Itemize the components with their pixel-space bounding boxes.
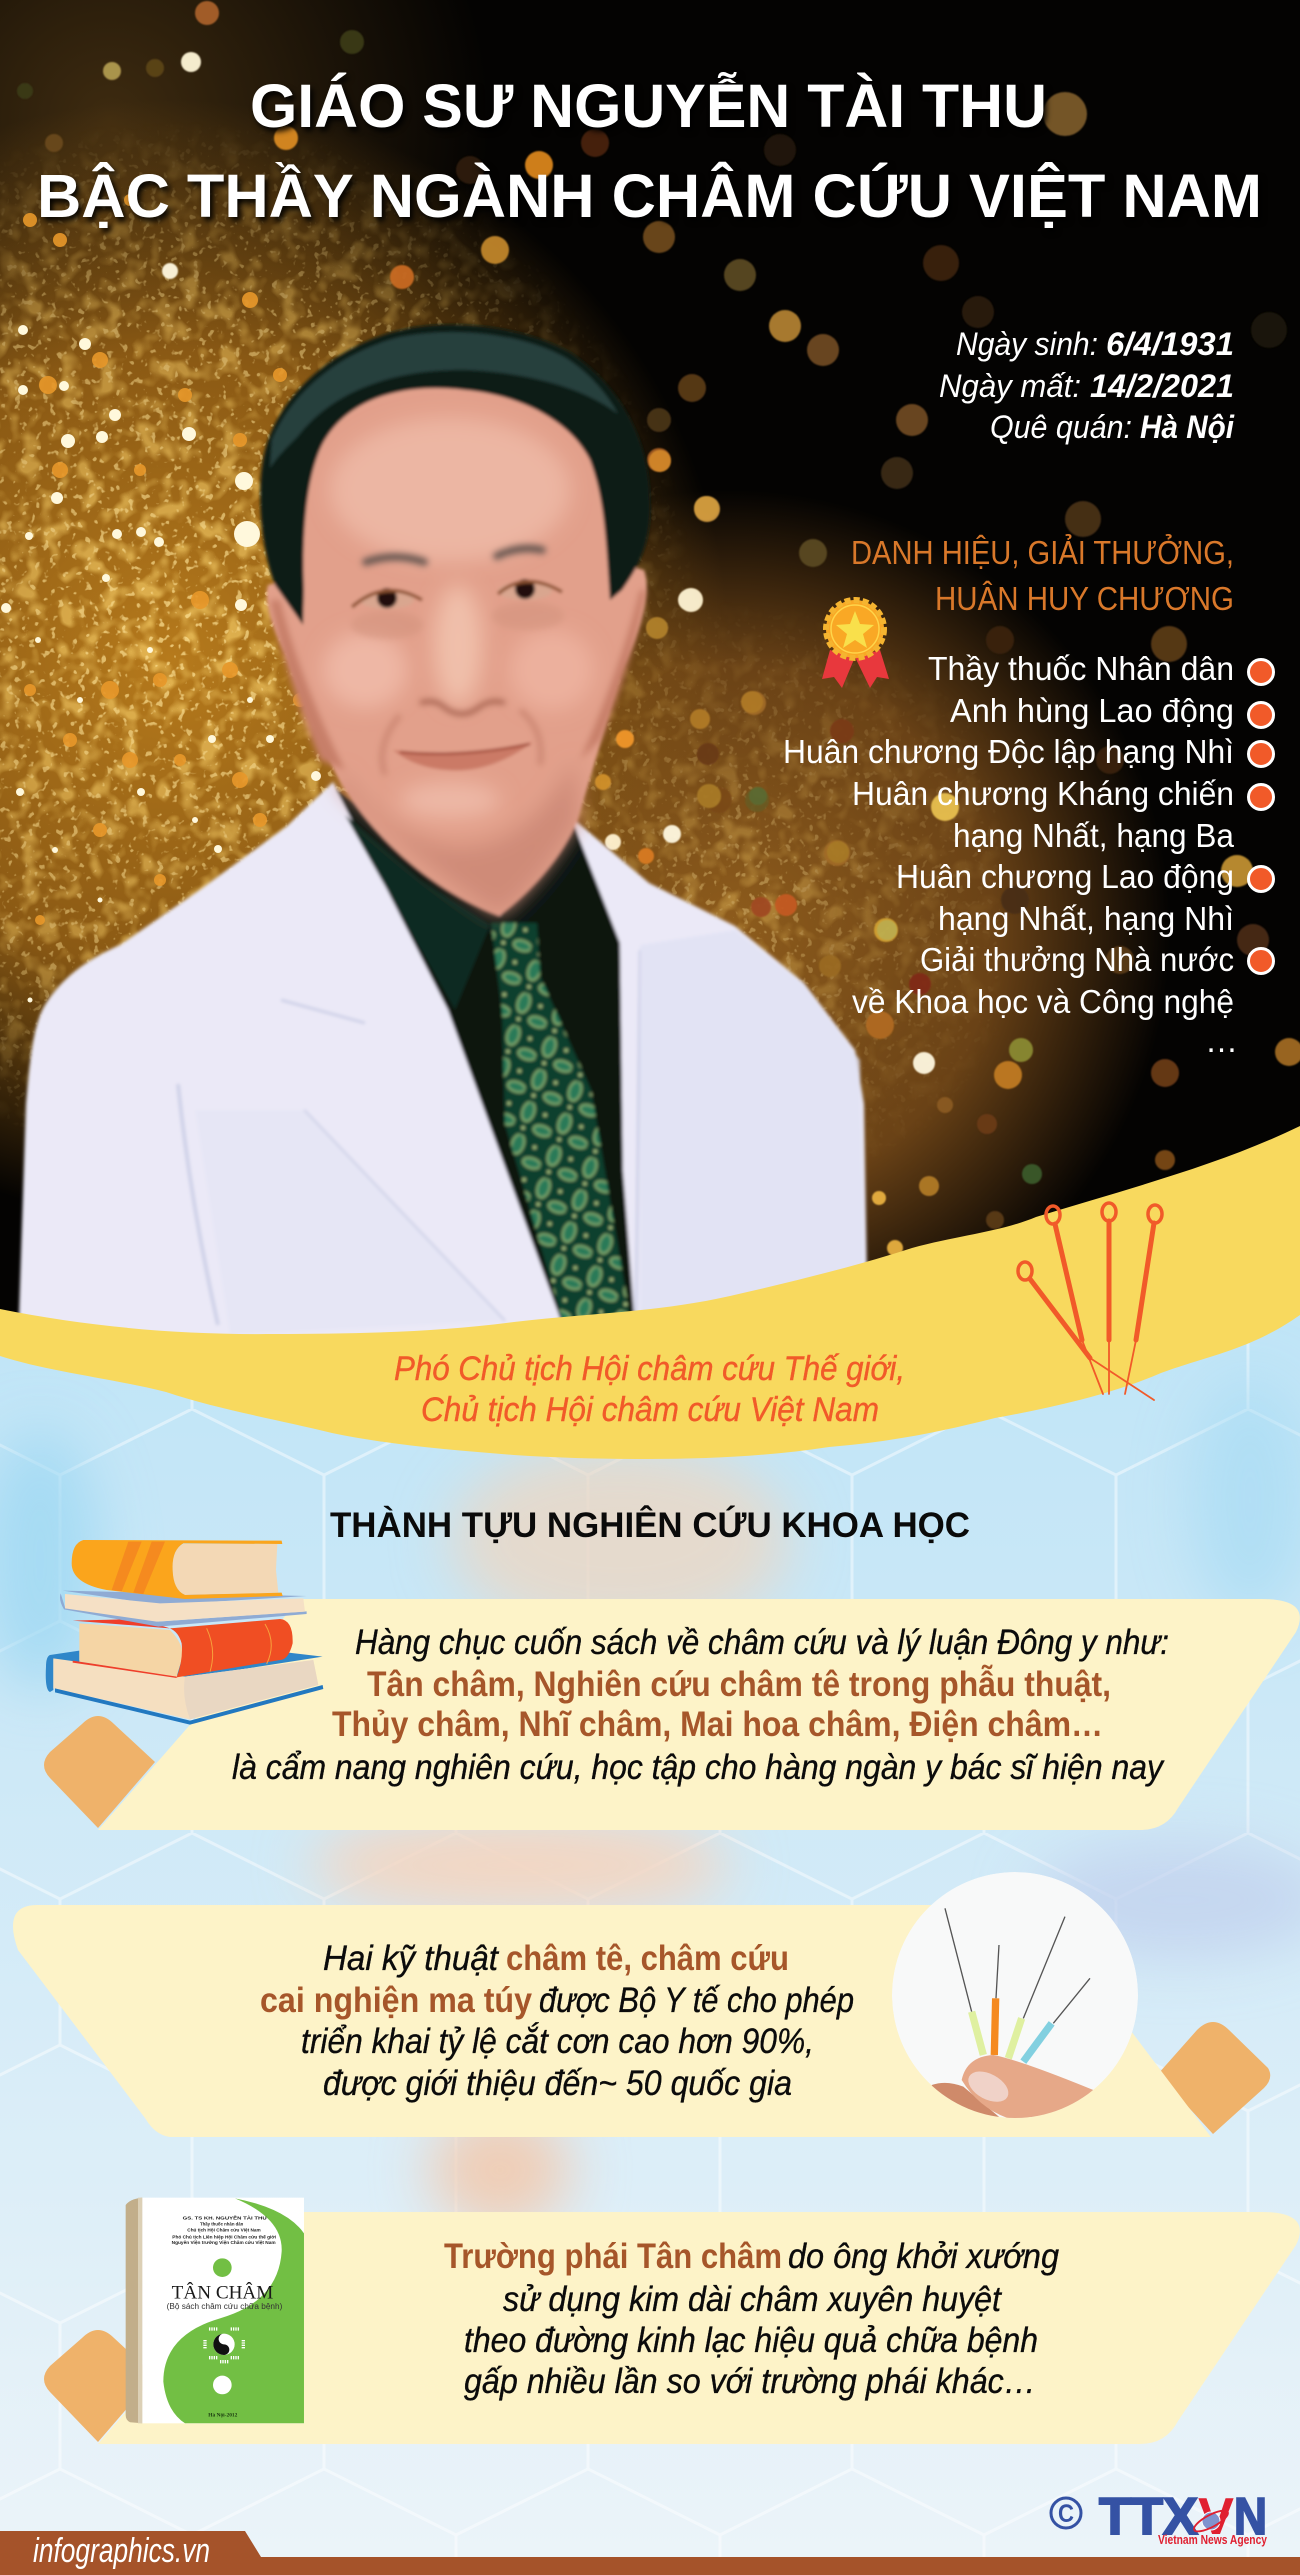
lower background: blue hexagons and blurred hand (0, 1220, 1300, 2575)
personal details: 14/2/2021 (1090, 368, 1234, 404)
panel text: theo đường kinh lạc hiệu quả chữa bệnh (464, 2321, 1038, 2360)
icon: Tân Châm book cover: TÂN CHÂM (172, 2281, 273, 2303)
panel: Tân châm school (44, 2198, 1300, 2444)
panel text (444, 2237, 1059, 2401)
neck and face (267, 384, 647, 916)
mouth (393, 742, 533, 770)
eyebrows (366, 548, 542, 562)
panel text: là cẩm nang nghiên cứu, học tập cho hàng ngàn y bác sĩ hiện nay (232, 1748, 1165, 1787)
ribbon caption (394, 1350, 905, 1429)
list of awards: Huân chương Kháng chiến (852, 775, 1234, 812)
icon: Tân Châm book cover: Chủ tịch Hội Châm cứu Việt Nam (187, 2228, 261, 2233)
panel text: do ông khởi xướng (788, 2237, 1059, 2276)
icon: Tân Châm book cover: Nguyên Viện trưởng Viện Châm cứu Việt Nam (172, 2240, 276, 2245)
black shirt (336, 789, 636, 1340)
icon: stack of books (46, 1540, 323, 1725)
panel text: gấp nhiều lần so với trường phái khác… (464, 2362, 1036, 2401)
nose (420, 701, 505, 714)
list of awards (783, 650, 1238, 1059)
heading: titles and awards: DANH HIỆU, GIẢI THƯỞNG, (851, 534, 1234, 571)
section heading: THÀNH TỰU NGHIÊN CỨU KHOA HỌC (330, 1505, 970, 1545)
heading: titles and awards (851, 534, 1234, 617)
personal details: Hà Nội (1140, 409, 1235, 445)
patterned tie (491, 923, 634, 1340)
list of awards: Giải thưởng Nhà nước (920, 941, 1234, 978)
logo: TTXVN: TTX (1099, 2488, 1198, 2546)
title (37, 72, 1262, 230)
logo: TTXVN: C (1058, 2500, 1074, 2528)
diamond accent (44, 2330, 155, 2442)
logo: TTXVN: N (1234, 2488, 1267, 2546)
logo: TTXVN (1051, 2488, 1267, 2547)
jacket (18, 782, 868, 1345)
list of awards: hạng Nhất, hạng Nhì (938, 900, 1234, 937)
panel text: cai nghiện ma túy (260, 1981, 532, 2020)
icon: Tân Châm book cover: Thầy thuốc nhân dân (200, 2222, 244, 2227)
list of awards: Huân chương Lao động (896, 858, 1234, 895)
panel shape (13, 1905, 1211, 2137)
list of awards: Anh hùng Lao động (950, 692, 1234, 729)
hair (260, 324, 650, 625)
title: BẬC THẦY NGÀNH CHÂM CỨU VIỆT NAM (37, 162, 1262, 230)
list of awards: … (1205, 1022, 1238, 1059)
panel shape (98, 1599, 1300, 1830)
panel text: Hàng chục cuốn sách về châm cứu và lý luận Đông y như: (355, 1623, 1169, 1662)
icon: acupuncture needles (1018, 1203, 1162, 1400)
title: GIÁO SƯ NGUYỄN TÀI THU (250, 72, 1047, 140)
panel text: triển khai tỷ lệ cắt cơn cao hơn 90%, (301, 2022, 814, 2061)
portrait: professor in white jacket (18, 324, 868, 1345)
personal details: Quê quán: (990, 409, 1132, 445)
icon: Tân Châm book cover: (Bộ sách châm cứu chữa bệnh) (167, 2302, 283, 2311)
icon: Tân Châm book cover: GS. TS KH. NGUYỄN TÀI THU (183, 2214, 267, 2220)
panel: acupuncture techniques (13, 1872, 1270, 2137)
panel text (260, 1939, 854, 2103)
footer bar (0, 2531, 1300, 2575)
personal details: Ngày sinh: (956, 326, 1098, 362)
personal details: 6/4/1931 (1106, 326, 1234, 362)
logo: TTXVN: V (1198, 2488, 1234, 2546)
panel text: Thủy châm, Nhĩ châm, Mai hoa châm, Điện châm… (332, 1705, 1103, 1744)
panel text: châm tê, châm cứu (506, 1939, 789, 1978)
panel text: sử dụng kim dài châm xuyên huyệt (503, 2280, 1002, 2319)
panel text: Tân châm, Nghiên cứu châm tê trong phẫu thuật, (367, 1664, 1111, 1704)
list of awards: Thầy thuốc Nhân dân (928, 650, 1234, 687)
panel text: Hai kỹ thuật (323, 1939, 499, 1978)
photo background: gold bokeh (0, 0, 1300, 1340)
icon: Tân Châm book cover: Hà Nội-2012 (208, 2414, 238, 2419)
footer site name: infographics.vn (33, 2532, 210, 2570)
heading: titles and awards: HUÂN HUY CHƯƠNG (935, 580, 1234, 617)
panel text (232, 1623, 1169, 1787)
icon: Tân Châm book cover: Phó Chủ tịch Liên hiệp Hội Châm cứu thế giới (172, 2234, 276, 2239)
panel shape (98, 2212, 1300, 2444)
list bullets (1248, 660, 1274, 974)
icon: gold medal (822, 600, 889, 688)
logo: TTXVN: Vietnam News Agency (1158, 2533, 1267, 2547)
panel: books achievement (44, 1540, 1300, 1830)
personal details (939, 326, 1235, 445)
yellow curved ribbon (0, 1126, 1300, 1459)
panel text: được Bộ Y tế cho phép (539, 1981, 854, 2020)
panel text: được giới thiệu đến~ 50 quốc gia (323, 2064, 792, 2103)
ribbon caption: Chủ tịch Hội châm cứu Việt Nam (421, 1391, 879, 1429)
panel text: Trường phái Tân châm (444, 2237, 782, 2276)
icon: Tân Châm book cover (126, 2198, 304, 2423)
personal details: Ngày mất: (939, 368, 1081, 404)
ribbon caption: Phó Chủ tịch Hội châm cứu Thế giới, (394, 1350, 905, 1388)
diamond accent (1158, 2022, 1270, 2134)
image: needles in fingers (892, 1872, 1138, 2123)
eyes (351, 579, 564, 639)
list of awards: về Khoa học và Công nghệ (852, 983, 1234, 1020)
list of awards: hạng Nhất, hạng Ba (953, 817, 1235, 854)
diamond accent (44, 1716, 155, 1828)
list of awards: Huân chương Độc lập hạng Nhì (783, 733, 1234, 770)
